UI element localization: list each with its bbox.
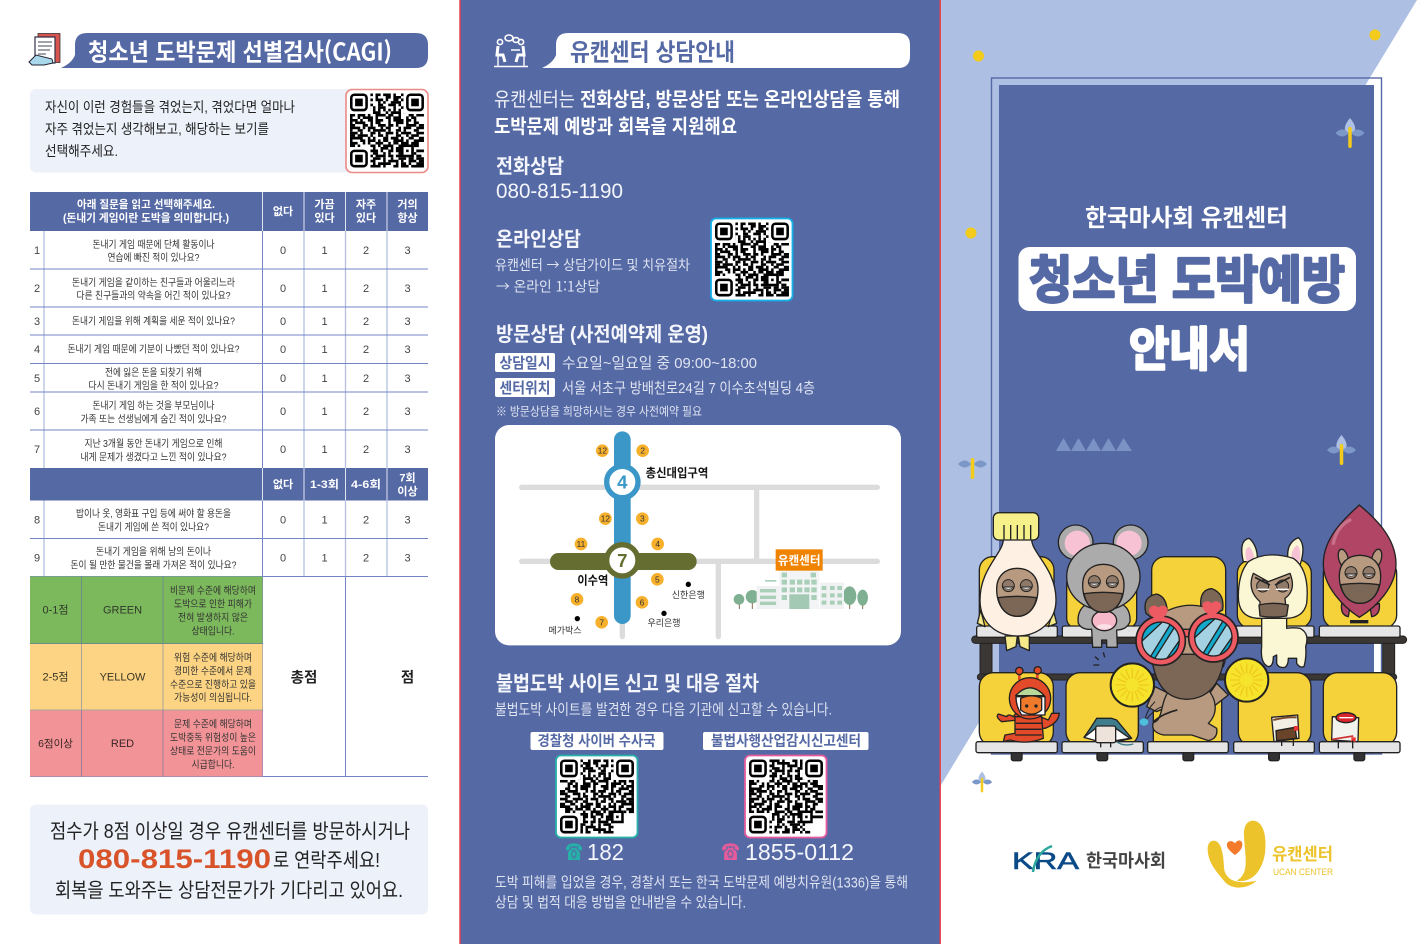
icon: flower 3: [958, 449, 987, 479]
question 9: 0: [280, 552, 286, 564]
panel: self-test background: [0, 0, 459, 944]
motion lines: [1093, 652, 1105, 665]
logo: Korea Racing Authority: [1012, 846, 1166, 875]
question 8: 돈내기 게임에 쓴 적이 있나요?: [98, 520, 209, 534]
question 6: 가족 또는 선생님에게 숨긴 적이 있나요?: [80, 414, 227, 426]
character: manta ray: [1084, 718, 1133, 747]
report agency: cyber bureau: [530, 732, 664, 866]
map: [495, 425, 901, 645]
visit counselling: 방문상담 (사전예약제 운영): [496, 323, 708, 346]
callout: contact advice: 080-815-1190: [78, 844, 271, 874]
character: hat snack: [1332, 713, 1359, 748]
landmarks: 신한은행: [672, 589, 705, 600]
question 2: 3: [404, 283, 411, 295]
back row seats: [979, 557, 1397, 628]
question 6: 2: [363, 406, 369, 418]
panel: counselling background: [460, 0, 940, 944]
total score: [291, 670, 414, 686]
text block: instructions: 자신이 이런 경험들을 겪었는지, 겪었다면 얼마나: [45, 99, 295, 115]
character: mayonnaise bottle: [977, 513, 1057, 651]
text block: introduction: 도박문제 예방과 회복을 지원해요: [494, 116, 737, 138]
question 5: 다시 돈내기 게임을 한 적이 있나요?: [88, 379, 219, 392]
heading: counselling guide: [542, 33, 910, 68]
question 1: 0: [280, 245, 286, 257]
illustration: cheering characters in seats: [972, 505, 1407, 761]
cover background shape: [941, 0, 1417, 785]
question 4: [34, 342, 411, 356]
section: illegal gambling report: [495, 672, 832, 718]
report agency: cyber bureau: ☎: [565, 840, 583, 866]
QR code: online counselling: [711, 218, 792, 300]
icon: people talking: [494, 35, 528, 66]
exit numbers: 7: [599, 617, 604, 627]
character: lobster: [997, 667, 1059, 742]
online counselling: 온라인상담: [496, 228, 581, 251]
report agency: illegal gambling center: ☎: [721, 840, 740, 866]
exit numbers: 2: [640, 446, 645, 456]
icon: flower 2: [1327, 435, 1356, 465]
question 8: 밥이나 옷, 영화표 구입 등에 써야 할 용돈을: [76, 507, 231, 520]
visit counselling: 상담일시: [500, 355, 550, 372]
exit numbers: 5: [655, 574, 660, 584]
decorative dots: [966, 30, 1380, 238]
exit numbers: 11: [577, 539, 586, 549]
cover inner panel: [999, 85, 1374, 754]
question 1: 돈내기 게임 때문에 단체 활동이나: [92, 238, 214, 251]
landmarks: [548, 582, 705, 635]
question 4: 0: [280, 344, 286, 356]
result: green tier: GREEN: [103, 604, 142, 616]
question 2: [34, 276, 411, 302]
table header: frequency: 7회: [399, 470, 416, 484]
panel edges: [460, 0, 940, 944]
question 8: 0: [280, 514, 286, 526]
question 4: 1: [321, 344, 328, 356]
table header: 자주: [356, 198, 376, 211]
station names: [577, 466, 708, 587]
text block: introduction: [494, 89, 900, 138]
question 1: 3: [404, 245, 411, 257]
character: sweet potato: [1323, 505, 1396, 622]
result: red tier: [30, 710, 262, 776]
station marker 4: 4: [617, 472, 628, 493]
callout: contact advice: 점수가 8점 이상일 경우 유캔센터를 방문하시거나: [50, 820, 410, 843]
question 4: 3: [404, 344, 411, 356]
question 4: 돈내기 게임 때문에 기분이 나빴던 적이 있나요?: [68, 342, 240, 356]
question 2: 1: [321, 283, 328, 295]
table header: frequency: 4-6회: [351, 477, 381, 491]
question 5: 0: [280, 373, 286, 385]
phone counselling: [496, 155, 623, 203]
report agency: illegal gambling center: [703, 732, 868, 866]
character: mouse: [1058, 525, 1148, 647]
question 6: 1: [321, 406, 328, 418]
online counselling: → 온라인 1:1상담: [496, 276, 600, 296]
question 8: 2: [363, 514, 369, 526]
table header: frequency: 없다: [273, 477, 293, 491]
landmarks: 우리은행: [647, 617, 681, 628]
question 2: 0: [280, 283, 286, 295]
station marker 7: [607, 545, 638, 576]
exit numbers: 12: [598, 446, 607, 456]
visit counselling: 수요일~일요일 중 09:00~18:00: [562, 355, 757, 372]
station marker 4: [607, 466, 638, 498]
question 7: 지난 3개월 동안 돈내기 게임으로 인해: [84, 437, 222, 450]
result: green tier: 전혀 발생하지 않은: [178, 611, 248, 624]
cover title: [1018, 247, 1356, 376]
question 6: 돈내기 게임 하는 것을 부모님이나: [92, 399, 214, 412]
report agency: illegal gambling center: 1855-0112: [745, 839, 854, 865]
question 3: 3: [34, 316, 40, 328]
question 7: 7: [34, 444, 40, 456]
callout: contact advice: 로 연락주세요!: [273, 849, 380, 872]
question 7: 내게 문제가 생겼다고 느낀 적이 있나요?: [80, 452, 227, 464]
exit numbers: 8: [575, 594, 580, 604]
landmarks: 메가박스: [548, 625, 582, 635]
icon: clipboard and pen: [29, 34, 60, 65]
question 1: 1: [321, 245, 328, 257]
heading: counselling guide: 유캔센터 상담안내: [570, 40, 735, 66]
callout: contact advice: [30, 804, 428, 914]
subway line 4: [614, 431, 631, 624]
building: UCAN center: [734, 549, 868, 609]
question 5: 3: [404, 373, 411, 385]
question 1: 연습에 빠진 적이 있나요?: [108, 252, 200, 264]
question 9: 돈이 될 만한 물건을 몰래 가져온 적이 있나요?: [70, 560, 237, 572]
question 3: 돈내기 게임을 위해 계획을 세운 적이 있나요?: [72, 314, 235, 328]
back row cushions: [977, 626, 1400, 637]
exit numbers: 6: [640, 597, 645, 607]
total score: 점: [401, 670, 414, 686]
question 6: 0: [280, 406, 286, 418]
report agency: illegal gambling center: 불법사행산업감시신고센터: [711, 733, 861, 750]
question 8: 8: [34, 514, 40, 526]
question 6: 6: [34, 406, 40, 418]
question 3: 1: [321, 316, 328, 328]
question 9: 돈내기 게임을 위해 남의 돈이나: [96, 545, 211, 558]
question 3: [34, 314, 411, 328]
visit counselling: 센터위치: [500, 380, 550, 397]
character: alpaca: [1238, 538, 1307, 667]
result: yellow tier: 2-5점: [42, 670, 69, 684]
question 8: 3: [404, 514, 411, 526]
cover frame: [992, 78, 1382, 754]
station names: 총신대입구역: [646, 466, 708, 480]
QR code: self-test: [346, 90, 428, 172]
question 7: 3: [404, 444, 411, 456]
text block: introduction: 전화상담, 방문상담 또는 온라인상담을 통해: [580, 89, 900, 111]
question 9: 1: [321, 552, 328, 564]
section: illegal gambling report: 불법도박 사이트 신고 및 대응 절차: [496, 672, 759, 696]
logo: Korea Racing Authority: KRA: [1012, 848, 1079, 875]
question 7: [34, 437, 411, 464]
question 5: 1: [321, 373, 328, 385]
result: yellow tier: [30, 644, 262, 710]
callout: contact advice: 회복을 도와주는 상담전문가가 기다리고 있어요.: [55, 879, 403, 902]
table header: 가끔: [314, 197, 335, 211]
question 6: 3: [404, 406, 411, 418]
report agency: cyber bureau: 경찰청 사이버 수사국: [538, 733, 656, 750]
exit numbers: 3: [640, 514, 645, 524]
result: green tier: 0-1점: [42, 604, 69, 616]
cover title: 안내서: [1129, 323, 1250, 376]
front row cushions and legs: [976, 742, 1400, 761]
question 1: 2: [363, 245, 369, 257]
table header: (돈내기 게임이란 도박을 의미합니다.): [63, 210, 229, 224]
table header: frequency: 이상: [397, 485, 418, 498]
character: cheering center horse: [1111, 589, 1268, 741]
question 3: 2: [363, 316, 369, 328]
rail and posts: [972, 636, 1407, 680]
triangles: [1056, 438, 1132, 451]
result: yellow tier: YELLOW: [100, 672, 146, 684]
exit numbers: [571, 444, 664, 629]
question 6: [34, 399, 411, 426]
logo: UCAN center: 유캔센터: [1272, 845, 1333, 864]
online counselling: [495, 228, 690, 296]
result: red tier: 도박중독 위험성이 높은: [170, 731, 256, 744]
question 4: 2: [363, 344, 369, 356]
character: chocolate snack: [1272, 715, 1299, 746]
result: red tier: 문제 수준에 해당하며: [174, 718, 252, 730]
question 2: 2: [363, 283, 369, 295]
exit numbers: 12: [601, 514, 610, 524]
result: green tier: 비문제 수준에 해당하며: [170, 584, 256, 597]
question 2: 돈내기 게임을 같이하는 친구들과 어울리느라: [72, 276, 235, 289]
text block: instructions: 선택해주세요.: [45, 143, 118, 159]
table header: 없다: [273, 204, 293, 218]
text block: instructions: 자주 겪었는지 생각해보고, 해당하는 보기를: [45, 121, 269, 137]
logo: Korea Racing Authority: 한국마사회: [1086, 851, 1166, 871]
table header: 있다: [356, 210, 376, 224]
result: green tier: 상태입니다.: [192, 624, 234, 638]
table header: frequency: [30, 468, 428, 500]
exit numbers: 4: [655, 539, 660, 549]
result: yellow tier: 위험 수준에 해당하며: [174, 651, 252, 664]
visit counselling: ※ 방문상담을 희망하시는 경우 사전예약 필요: [496, 402, 702, 420]
station marker 7: 7: [617, 550, 628, 571]
text block: instructions: [30, 89, 428, 172]
result: yellow tier: 수준으로 진행하고 있을: [170, 678, 256, 691]
phone counselling: 080-815-1190: [496, 180, 623, 203]
subway line 7: [550, 553, 697, 570]
logo: UCAN center: [1208, 821, 1333, 888]
question 8: 1: [321, 514, 328, 526]
report agency: cyber bureau: 182: [587, 839, 624, 865]
result: yellow tier: 경미한 수준에서 문제: [174, 664, 252, 678]
panel: cover: [941, 0, 1417, 888]
question 7: 2: [363, 444, 369, 456]
question 5: [34, 366, 411, 392]
result: green tier: 도박으로 인한 피해가: [174, 598, 252, 610]
text block: legal help: [495, 874, 908, 912]
question 9: 3: [404, 552, 411, 564]
table: CAGI questionnaire: [30, 192, 428, 776]
total score: 총점: [291, 670, 317, 686]
logo: UCAN center: UCAN CENTER: [1273, 867, 1333, 878]
text block: legal help: 도박 피해를 입었을 경우, 경찰서 또는 한국 도박문제 예방치유원(1336)을 통해: [495, 874, 908, 892]
question 1: 1: [34, 245, 40, 257]
panel: self-test: [29, 32, 428, 914]
question 9: [34, 545, 411, 572]
result: red tier: RED: [111, 738, 134, 750]
icon: flower 4: [972, 772, 992, 792]
question 3: 3: [404, 316, 411, 328]
front row seats: [979, 673, 1397, 746]
result: red tier: 시급합니다.: [192, 759, 234, 771]
question 3: 0: [280, 316, 286, 328]
question 8: [34, 507, 411, 534]
visit counselling: [495, 323, 815, 420]
question 5: 5: [34, 373, 40, 385]
text block: introduction: 유캔센터는: [494, 89, 575, 111]
question 7: 0: [280, 444, 286, 456]
table header: [30, 192, 428, 231]
table header: frequency: 1-3회: [310, 477, 339, 491]
question 1: [34, 238, 411, 264]
table header: 아래 질문을 읽고 선택해주세요.: [77, 197, 215, 211]
online counselling: 유캔센터 → 상담가이드 및 치유절차: [495, 255, 690, 275]
icon: flower 1: [1336, 118, 1364, 148]
cover title: 청소년 도박예방: [1029, 252, 1345, 309]
text block: legal help: 상담 및 법적 대응 방법을 안내받을 수 있습니다.: [495, 894, 746, 912]
question 5: 2: [363, 373, 369, 385]
question 7: 1: [321, 444, 328, 456]
question 9: 2: [363, 552, 369, 564]
question 2: 2: [34, 283, 40, 295]
section: illegal gambling report: 불법도박 사이트를 발견한 경우 다음 기관에 신고할 수 있습니다.: [495, 702, 832, 718]
result: red tier: 6점이상: [38, 738, 73, 750]
heading: self-test: 청소년 도박문제 선별검사(CAGI): [88, 32, 392, 68]
result: yellow tier: 가능성이 의심됩니다.: [174, 691, 252, 704]
panel: counselling information: [494, 33, 910, 912]
table header: 항상: [397, 210, 418, 224]
question 5: 전에 잃은 돈을 되찾기 위해: [105, 366, 202, 379]
result: green tier: [30, 576, 262, 644]
question 9: 9: [34, 552, 40, 564]
station names: 이수역: [577, 573, 608, 587]
building: UCAN center: 유캔센터: [778, 553, 820, 567]
visit counselling: 서울 서초구 방배천로24길 7 이수초석빌딩 4층: [562, 380, 815, 397]
table grid: [30, 192, 428, 776]
table header: 거의: [397, 197, 418, 211]
question 2: 다른 친구들과의 약속을 어긴 적이 있나요?: [76, 290, 231, 302]
phone counselling: 전화상담: [496, 155, 564, 178]
result: red tier: 상태로 전문가의 도움이: [170, 746, 256, 758]
question 4: 4: [34, 344, 40, 356]
table header: 있다: [314, 210, 335, 224]
cover subtitle: 한국마사회 유캔센터: [1085, 205, 1288, 232]
